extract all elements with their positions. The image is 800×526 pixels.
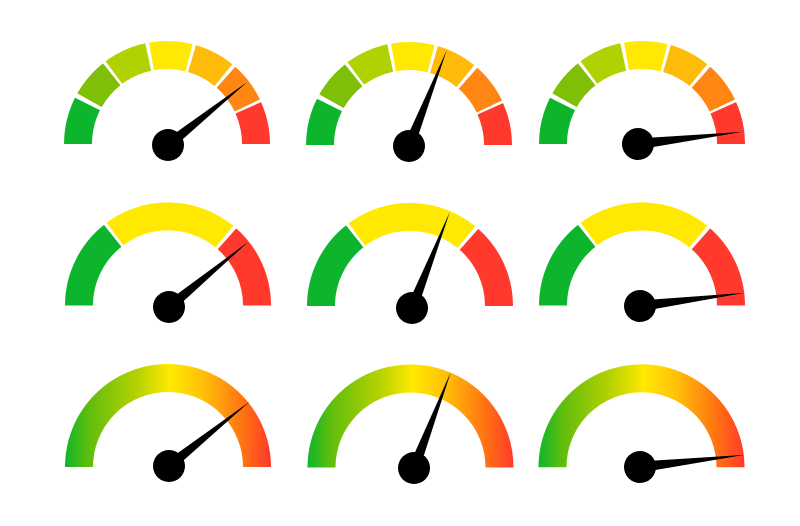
needle <box>152 77 251 161</box>
gauge: row 3 column 1, gradient arc <box>79 378 257 482</box>
gauge: row 3 column 2, gradient arc <box>322 370 500 484</box>
gauge: row 2 column 2, three segments <box>321 210 499 324</box>
needle <box>396 210 455 324</box>
gauge: row 3 column 3, gradient arc <box>552 378 745 483</box>
needle <box>153 237 252 323</box>
gauge: row 2 column 1, three segments <box>79 216 257 323</box>
needle <box>622 126 743 160</box>
gauge: row 1 column 2, seven segments <box>320 48 498 162</box>
needle <box>398 370 456 484</box>
needle <box>624 449 745 483</box>
gauge: row 1 column 1, seven segments <box>78 55 256 161</box>
needle <box>153 397 253 482</box>
gauge: row 1 column 3, seven segments <box>553 55 743 160</box>
gauge: row 2 column 3, three segments <box>553 216 745 322</box>
needle <box>393 48 452 162</box>
needle <box>624 287 745 322</box>
